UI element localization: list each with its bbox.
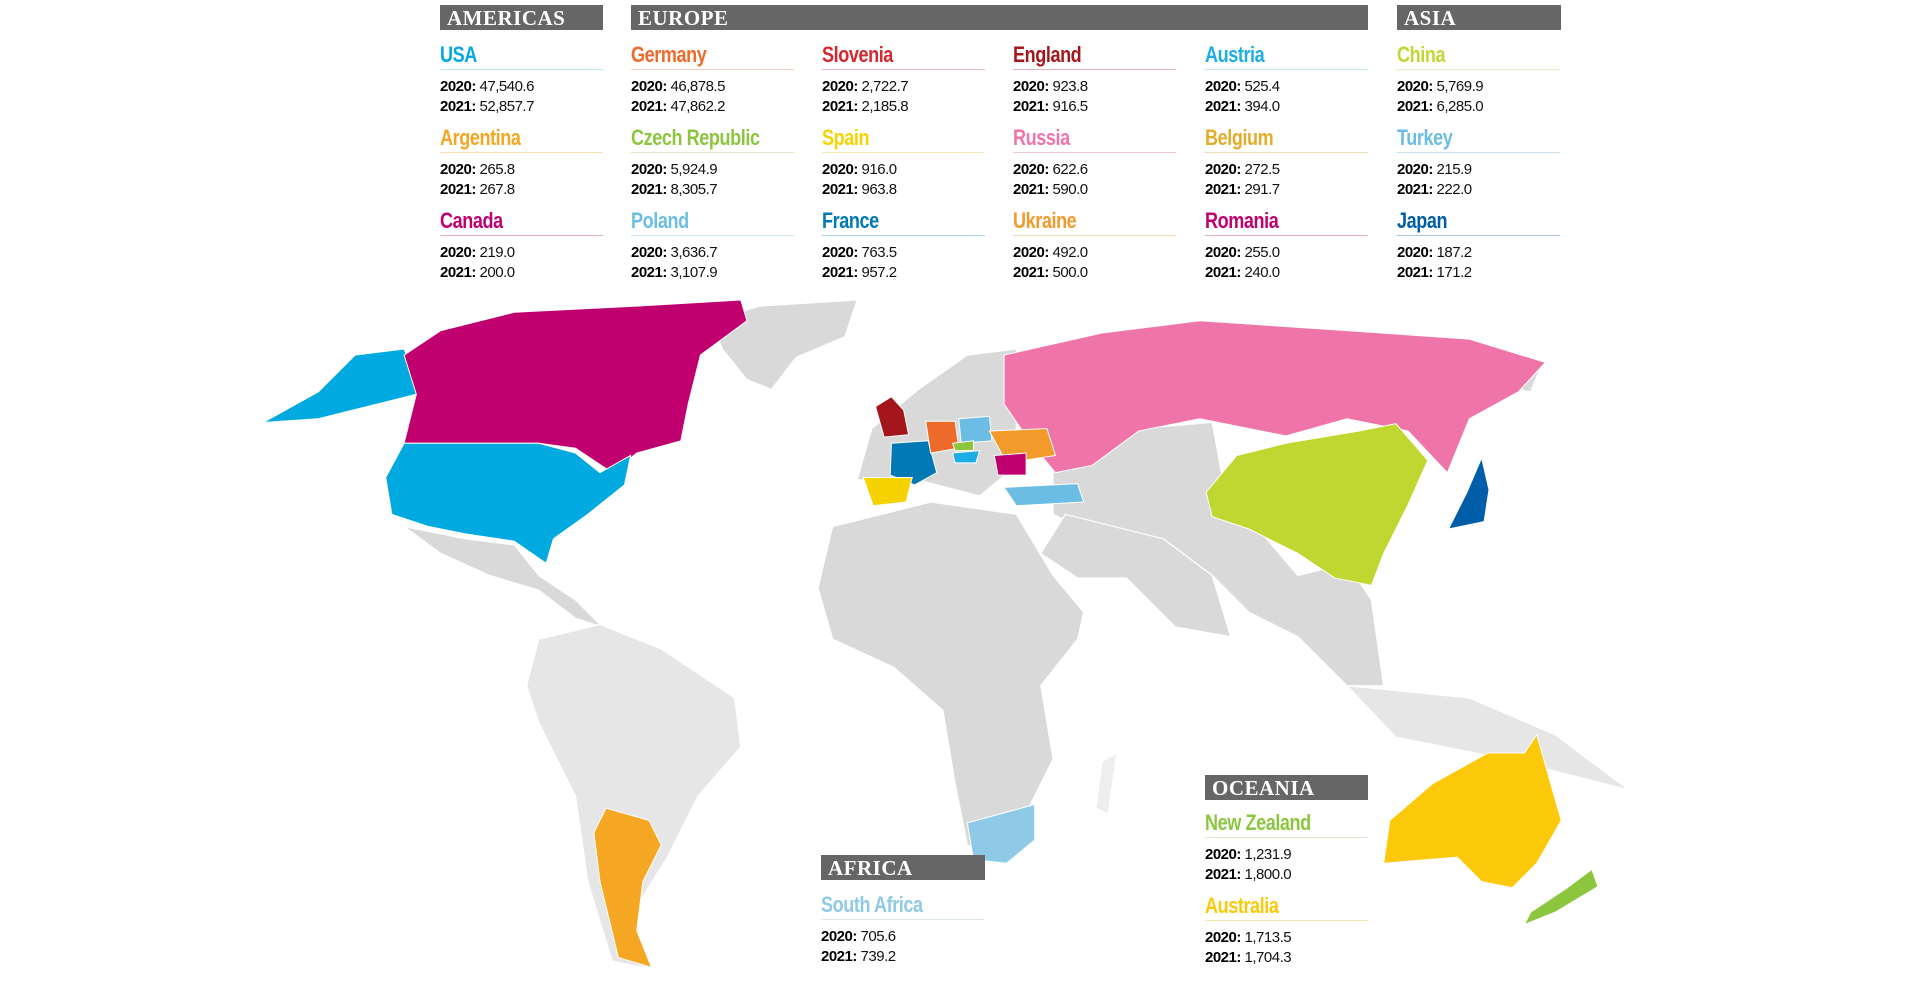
- Czech Republic: 2021: 8,305.7: [631, 181, 717, 198]
- New Zealand: [1205, 810, 1368, 883]
- Japan: 2021: 171.2: [1397, 264, 1472, 281]
- USA: [440, 42, 603, 115]
- header: oceania: OCEANIA: [1212, 776, 1315, 800]
- Slovenia: 2020: 2,722.7: [822, 78, 908, 95]
- France: 2020: 763.5: [822, 244, 897, 261]
- Russia: Russia: [1013, 125, 1070, 150]
- Germany: 2021: 47,862.2: [631, 98, 725, 115]
- Belgium: 2020: 272.5: [1205, 161, 1280, 178]
- header: europe: EUROPE: [638, 6, 729, 30]
- Australia: 2021: 1,704.3: [1205, 949, 1291, 966]
- Australia: Australia: [1205, 893, 1279, 918]
- Belgium: Belgium: [1205, 125, 1273, 150]
- Slovenia: Slovenia: [822, 42, 893, 67]
- Spain: [822, 125, 985, 198]
- Slovenia: 2021: 2,185.8: [822, 98, 908, 115]
- South Africa: 2020: 705.6: [821, 928, 896, 945]
- Turkey: [1397, 125, 1560, 198]
- header: europe: [631, 5, 1368, 30]
- Japan: 2020: 187.2: [1397, 244, 1472, 261]
- header: americas: [440, 5, 603, 30]
- Poland: 2020: 3,636.7: [631, 244, 717, 261]
- Czech Republic: [631, 125, 794, 198]
- Germany: 2020: 46,878.5: [631, 78, 725, 95]
- Germany: Germany: [631, 42, 706, 67]
- Canada: 2021: 200.0: [440, 264, 515, 281]
- header: oceania: [1205, 775, 1368, 800]
- New Zealand: New Zealand: [1205, 810, 1311, 835]
- Ukraine: Ukraine: [1013, 208, 1076, 233]
- Turkey: 2021: 222.0: [1397, 181, 1472, 198]
- Austria: 2020: 525.4: [1205, 78, 1280, 95]
- Germany: [631, 42, 794, 115]
- Canada: [440, 208, 603, 281]
- New Zealand: 2021: 1,800.0: [1205, 866, 1291, 883]
- Argentina: 2020: 265.8: [440, 161, 515, 178]
- New Zealand: 2020: 1,231.9: [1205, 846, 1291, 863]
- USA: 2020: 47,540.6: [440, 78, 534, 95]
- China: China: [1397, 42, 1445, 67]
- Turkey: Turkey: [1397, 125, 1452, 150]
- Poland: Poland: [631, 208, 689, 233]
- China: 2020: 5,769.9: [1397, 78, 1483, 95]
- USA: USA: [440, 42, 477, 67]
- Austria: [1205, 42, 1368, 115]
- Australia: [1205, 893, 1368, 966]
- France: [822, 208, 985, 281]
- header: americas: AMERICAS: [447, 6, 565, 30]
- China: [1397, 42, 1560, 115]
- Argentina: 2021: 267.8: [440, 181, 515, 198]
- Austria: 2021: 394.0: [1205, 98, 1280, 115]
- Argentina: [440, 125, 603, 198]
- Poland: 2021: 3,107.9: [631, 264, 717, 281]
- Romania: 2021: 240.0: [1205, 264, 1280, 281]
- Australia: 2020: 1,713.5: [1205, 929, 1291, 946]
- Poland: [631, 208, 794, 281]
- Belgium: 2021: 291.7: [1205, 181, 1280, 198]
- Russia: 2020: 622.6: [1013, 161, 1088, 178]
- Romania: Romania: [1205, 208, 1278, 233]
- Argentina: Argentina: [440, 125, 521, 150]
- England: 2021: 916.5: [1013, 98, 1088, 115]
- Ukraine: [1013, 208, 1176, 281]
- Spain: Spain: [822, 125, 869, 150]
- header: africa: [821, 855, 985, 880]
- South Africa: 2021: 739.2: [821, 948, 896, 965]
- header: africa: AFRICA: [828, 856, 913, 880]
- Czech Republic: Czech Republic: [631, 125, 760, 150]
- Canada: 2020: 219.0: [440, 244, 515, 261]
- Spain: 2020: 916.0: [822, 161, 897, 178]
- Russia: [1013, 125, 1176, 198]
- header: asia: [1397, 5, 1561, 30]
- England: [1013, 42, 1176, 115]
- Austria: Austria: [1205, 42, 1264, 67]
- gray landmasses: [404, 300, 1629, 967]
- Romania: 2020: 255.0: [1205, 244, 1280, 261]
- Romania: [1205, 208, 1368, 281]
- England: 2020: 923.8: [1013, 78, 1088, 95]
- China: 2021: 6,285.0: [1397, 98, 1483, 115]
- USA: 2021: 52,857.7: [440, 98, 534, 115]
- Japan: [1397, 208, 1560, 281]
- Ukraine: 2020: 492.0: [1013, 244, 1088, 261]
- England: England: [1013, 42, 1081, 67]
- Czech Republic: 2020: 5,924.9: [631, 161, 717, 178]
- France: 2021: 957.2: [822, 264, 897, 281]
- Japan: Japan: [1397, 208, 1447, 233]
- France: France: [822, 208, 879, 233]
- Belgium: [1205, 125, 1368, 198]
- Slovenia: [822, 42, 985, 115]
- Turkey: 2020: 215.9: [1397, 161, 1472, 178]
- Ukraine: 2021: 500.0: [1013, 264, 1088, 281]
- colored countries: [263, 300, 1598, 967]
- Spain: 2021: 963.8: [822, 181, 897, 198]
- header: asia: ASIA: [1404, 6, 1456, 30]
- South Africa: South Africa: [821, 892, 923, 917]
- Canada: Canada: [440, 208, 503, 233]
- South Africa: [821, 892, 984, 965]
- Russia: 2021: 590.0: [1013, 181, 1088, 198]
